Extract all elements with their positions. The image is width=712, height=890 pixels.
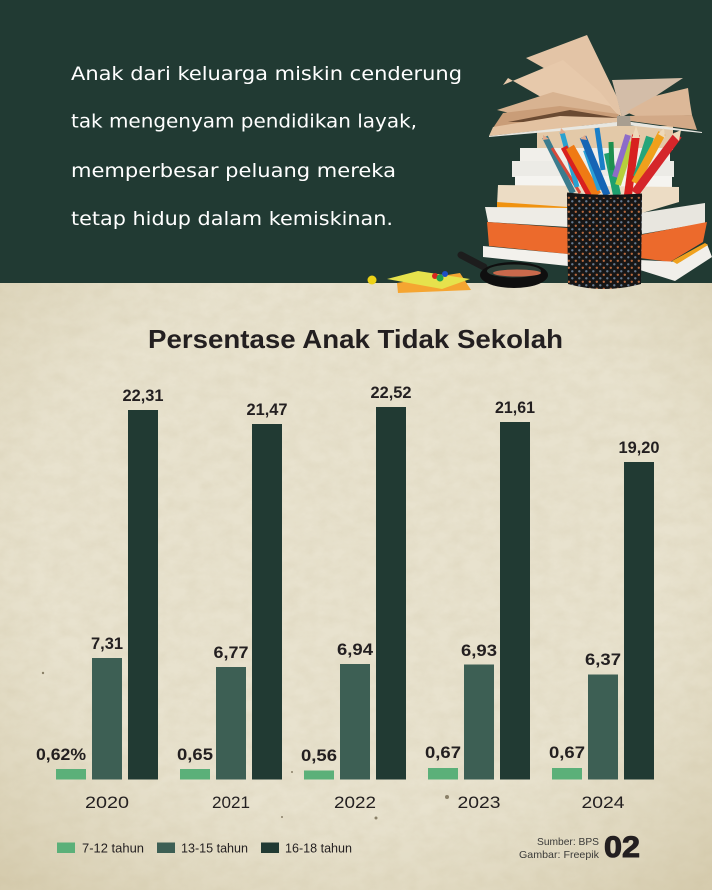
group 2021 (177, 400, 288, 812)
header band (0, 0, 712, 283)
group 2020: 2020 (85, 793, 129, 812)
group 2023 (425, 398, 535, 812)
source credits (519, 836, 600, 861)
source credits: Sumber: BPS (537, 836, 599, 848)
group 2023: 6,93 (461, 641, 497, 660)
paper background (0, 283, 712, 890)
group 2024: 2024 (582, 793, 624, 812)
open book (489, 35, 702, 137)
group 2024: 0,67 (549, 743, 585, 762)
group 2023: 0,67 (425, 743, 461, 762)
group 2020: 7,31 (91, 634, 123, 653)
pencils (543, 126, 681, 195)
legend: 7-12 tahun (82, 842, 144, 856)
group 2021: 0,65 (177, 745, 213, 764)
group 2021: 6,77 (214, 643, 248, 662)
intro text (71, 63, 462, 230)
group 2022: 0,56 (301, 746, 337, 765)
chart title: Persentase Anak Tidak Sekolah (148, 324, 563, 354)
group 2023: 2023 (458, 793, 500, 812)
group 2024 (549, 438, 660, 812)
group 2020: 22,31 (122, 386, 164, 405)
group 2022 (301, 383, 412, 812)
intro text: memperbesar peluang mereka (71, 160, 396, 182)
illustration: books and pencils (368, 35, 712, 293)
group 2021: 2021 (212, 793, 250, 812)
group 2024: 19,20 (618, 438, 660, 457)
group 2021: 21,47 (246, 400, 288, 419)
stacked books (483, 126, 712, 281)
legend: 13-15 tahun (181, 842, 248, 856)
group 2024: 6,37 (585, 650, 621, 669)
source credits: Gambar: Freepik (519, 849, 600, 861)
magnifying glass (461, 255, 548, 288)
intro text: Anak dari keluarga miskin cenderung (71, 63, 462, 85)
legend (57, 842, 352, 856)
intro text: tak mengenyam pendidikan layak, (71, 110, 417, 132)
group 2022: 22,52 (370, 383, 412, 402)
bar chart (36, 383, 660, 812)
pencil holder (567, 194, 642, 289)
group 2022: 6,94 (337, 640, 374, 659)
sticky notes and pins (368, 271, 471, 293)
intro text: tetap hidup dalam kemiskinan. (71, 208, 393, 230)
group 2022: 2022 (334, 793, 376, 812)
page number: 02 (604, 831, 640, 864)
legend: 16-18 tahun (285, 842, 352, 856)
group 2020 (36, 386, 164, 812)
group 2020: 0,62% (36, 745, 86, 764)
group 2023: 21,61 (495, 398, 535, 417)
